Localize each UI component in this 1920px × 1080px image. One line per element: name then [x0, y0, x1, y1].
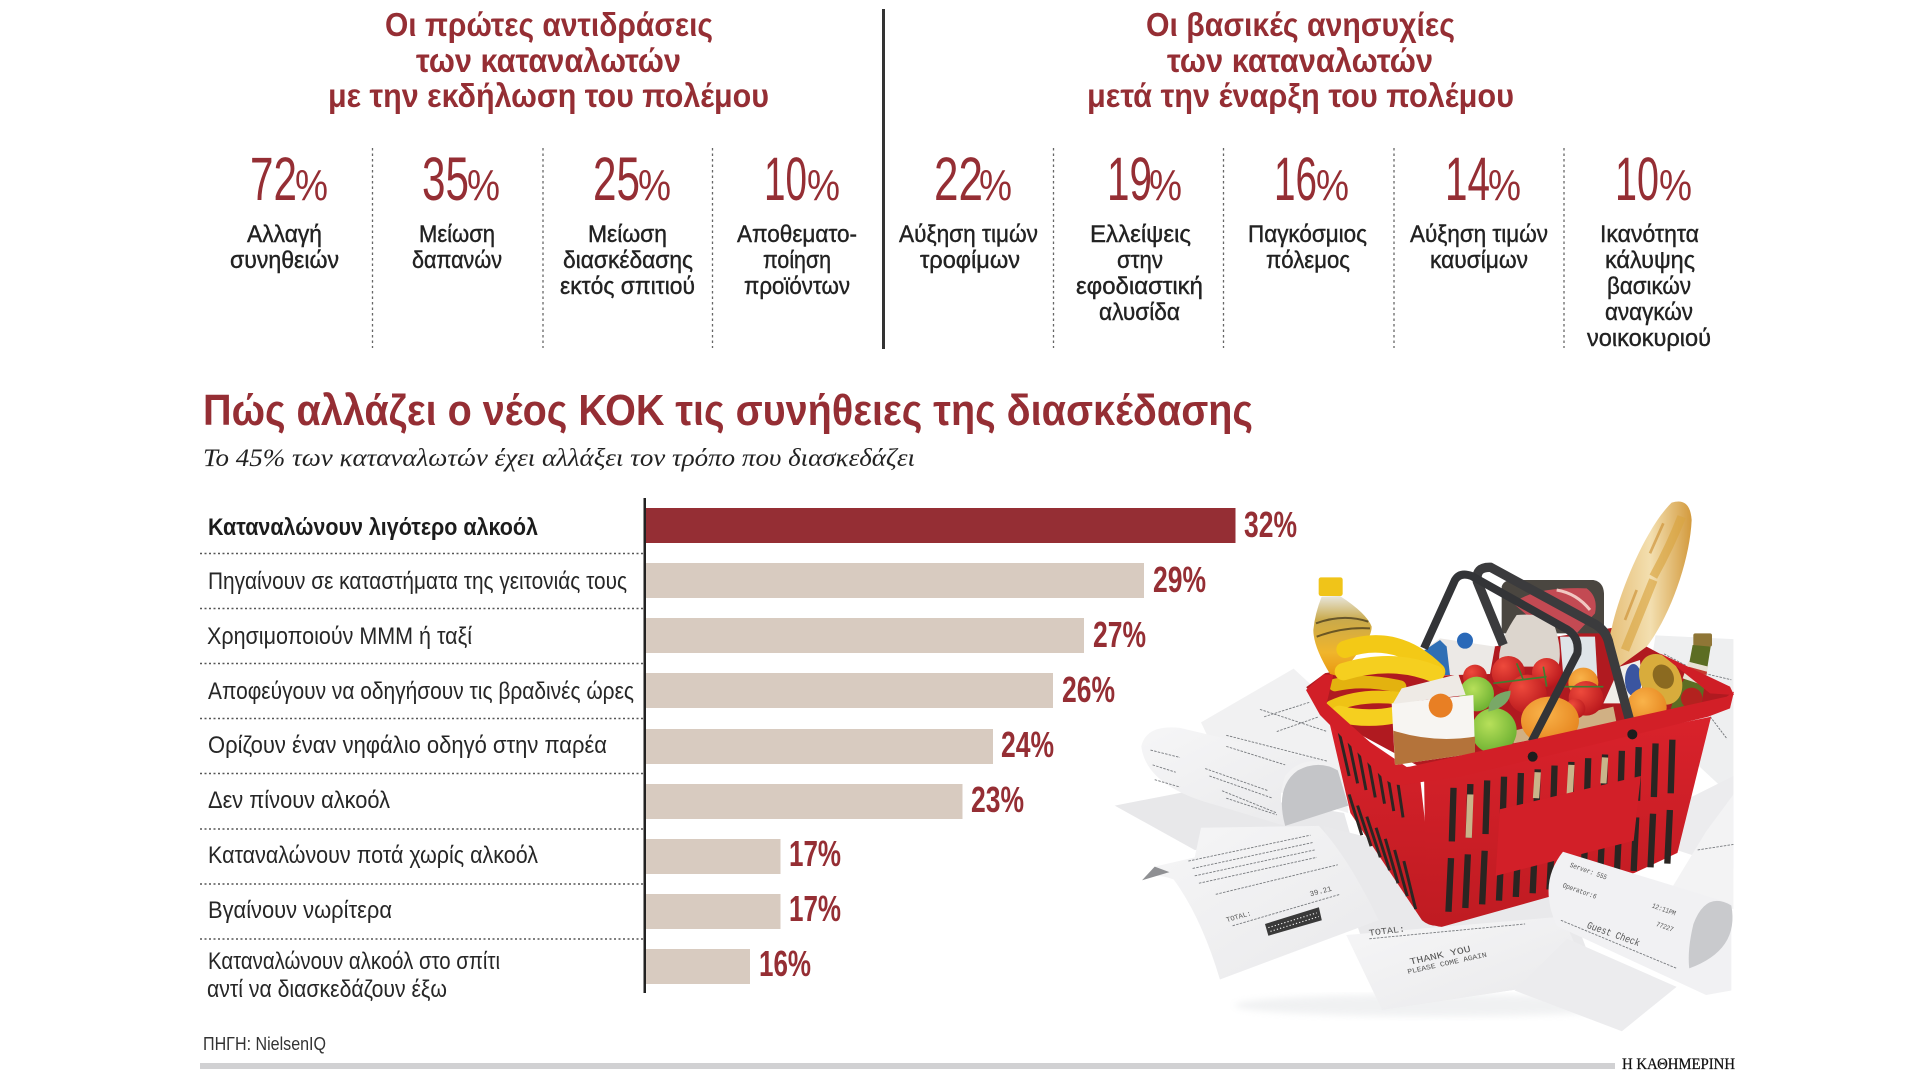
stat: 25% reduced entertainment: % [638, 161, 671, 210]
stat: 14% fuel prices: καυσίμων [1430, 247, 1528, 274]
stat: 22% food prices: % [979, 161, 1012, 210]
panel: first consumer reactions [230, 6, 857, 300]
receipts pile: THANK YOU [1409, 945, 1472, 968]
oil bottle [1313, 577, 1372, 677]
meat tray [1502, 580, 1604, 633]
receipts pile: PLEASE COME AGAIN [1407, 952, 1488, 977]
publisher logo: Η ΚΑΘΗΜΕΡΙΝΗ [1622, 1056, 1735, 1073]
right receipt roll over basket [1549, 852, 1731, 995]
row labels: αντί να διασκεδάζουν έξω [207, 976, 447, 1003]
receipts pile: TOTAL: [1368, 924, 1406, 939]
stat: 10% household needs: 10 [1615, 145, 1659, 213]
stat: 19% supply chain shortages: αλυσίδα [1099, 299, 1180, 326]
row labels: Καταναλώνουν ποτά χωρίς αλκοόλ [208, 842, 538, 869]
tomatoes and oranges [1463, 656, 1617, 745]
panel: bar chart of entertainment habits [200, 498, 1297, 1003]
row labels: Βγαίνουν νωρίτερα [208, 897, 392, 924]
stat: 10% stockpiling: % [807, 161, 840, 210]
heading: main concerns: των καταναλωτών [1167, 42, 1433, 79]
centre divider [882, 9, 885, 349]
bar values: 26% [1062, 669, 1115, 710]
illustration: shopping basket on receipts [1115, 628, 1733, 1031]
stat: 72% change of habits [230, 145, 339, 274]
heading: main concerns: Οι βασικές ανησυχίες [1146, 6, 1455, 43]
stat: 72% change of habits: 72 [250, 145, 297, 213]
stat: 19% supply chain shortages: στην [1117, 247, 1163, 274]
stat: 25% reduced entertainment: διασκέδασης [563, 247, 693, 274]
bananas [1332, 644, 1437, 718]
stat: 14% fuel prices: % [1488, 161, 1521, 210]
bar values: 17% [789, 888, 841, 929]
row labels: Δεν πίνουν αλκοόλ [208, 787, 390, 814]
row labels: Χρησιμοποιούν ΜΜΜ ή ταξί [207, 623, 473, 650]
bar values: 32% [1244, 504, 1297, 545]
stat: 25% reduced entertainment: εκτός σπιτιού [560, 273, 695, 300]
juice carton [1392, 674, 1475, 765]
front handle [1424, 575, 1578, 742]
illustration: shopping basket on receipts: 77227 [1655, 921, 1675, 934]
stat: 10% household needs: αναγκών [1605, 299, 1693, 326]
source note: ΠΗΓΗ: NielsenIQ [203, 1034, 326, 1054]
stat: 10% household needs: νοικοκυριού [1587, 325, 1711, 352]
basket body: left face [1327, 713, 1437, 926]
stat: 10% household needs: Ικανότητα [1600, 221, 1699, 248]
bar values: 29% [1153, 559, 1206, 600]
row labels: Ορίζουν έναν νηφάλιο οδηγό στην παρέα [208, 732, 607, 759]
stat: 35% reduced spending: % [467, 161, 500, 210]
stat: 19% supply chain shortages: εφοδιαστική [1076, 273, 1203, 300]
stat: 10% stockpiling: Αποθεματο- [737, 221, 857, 248]
row labels: Καταναλώνουν λιγότερο αλκοόλ [208, 514, 538, 541]
illustration: shopping basket on receipts: Operator:6 [1561, 882, 1598, 901]
stat: 10% household needs [1587, 145, 1711, 352]
heading: first reactions: των καταναλωτών [416, 42, 681, 79]
stat: 25% reduced entertainment: Μείωση [588, 221, 667, 248]
stat: 72% change of habits: Αλλαγή [247, 221, 322, 248]
stat: 10% household needs: κάλυψης [1605, 247, 1695, 274]
stat: 16% world war: Παγκόσμιος [1248, 221, 1367, 248]
main heading: Πώς αλλάζει ο νέος ΚΟΚ τις συνήθειες της διασκέδασης [203, 386, 1253, 435]
receipts pile: 39.21 [1309, 886, 1334, 899]
bar values: 23% [971, 779, 1024, 820]
beer bottle label [1560, 637, 1597, 677]
blue carton [1423, 633, 1495, 675]
footer bar [200, 1063, 1615, 1069]
stat: 35% reduced spending: 35 [422, 145, 469, 213]
stat: 19% supply chain shortages: Ελλείψεις [1090, 221, 1191, 248]
stat: 72% change of habits: % [295, 161, 328, 210]
baguette [1609, 501, 1692, 668]
bar values: 16% [759, 943, 811, 984]
bars [646, 508, 1236, 984]
bottle and can on the right [1603, 633, 1712, 727]
illustration: shopping basket on receipts: 12:11PM [1650, 902, 1677, 918]
stat: 16% world war: πόλεμος [1266, 247, 1350, 274]
bar values [759, 504, 1297, 984]
stat: 16% world war: 16 [1274, 145, 1317, 213]
panel: main consumer concerns [899, 6, 1711, 352]
apples [1459, 677, 1517, 753]
stat: 35% reduced spending: Μείωση [419, 221, 495, 248]
illustration: shopping basket on receipts: Guest Check [1585, 920, 1642, 949]
stat: 10% household needs: βασικών [1607, 273, 1691, 300]
row labels: Πηγαίνουν σε καταστήματα της γειτονιάς τους [208, 568, 627, 595]
front rim [1306, 674, 1734, 785]
row labels: Καταναλώνουν αλκοόλ στο σπίτι [208, 948, 500, 975]
stat: 10% stockpiling: ποίηση [763, 247, 831, 274]
stat: 16% world war: % [1316, 161, 1349, 210]
heading: first reactions [328, 6, 769, 114]
stat: 14% fuel prices [1410, 145, 1548, 274]
bar values: 17% [789, 833, 841, 874]
stat: 25% reduced entertainment [560, 145, 695, 300]
stat: 35% reduced spending: δαπανών [412, 247, 502, 274]
stat: 72% change of habits: συνηθειών [230, 247, 339, 274]
receipts pile [1115, 635, 1733, 1031]
vertical axis [644, 498, 646, 993]
groceries in the basket [1313, 501, 1712, 765]
basket rim and handles [1306, 567, 1734, 785]
stat: 25% reduced entertainment: 25 [593, 145, 640, 213]
stat: 22% food prices: 22 [934, 145, 983, 213]
basket label plate [1496, 776, 1641, 876]
basket back and interior [1306, 628, 1733, 776]
heading: first reactions: Οι πρώτες αντιδράσεις [385, 6, 713, 43]
receipts pile: TOTAL: [1225, 910, 1253, 925]
subtitle: Το 45% των καταναλωτών έχει αλλάξει τον τρόπο που διασκεδάζει [203, 445, 915, 472]
stat: 10% household needs: % [1659, 161, 1692, 210]
back handle [1477, 567, 1630, 722]
bar values: 24% [1001, 724, 1054, 765]
stat: 10% stockpiling: προϊόντων [744, 273, 850, 300]
heading: main concerns [1087, 6, 1514, 114]
basket body: front face [1424, 717, 1711, 927]
stat: 19% supply chain shortages: % [1149, 161, 1182, 210]
stat: 19% supply chain shortages [1076, 145, 1203, 326]
row labels [207, 514, 634, 1003]
stat: 14% fuel prices: Αύξηση τιμών [1410, 221, 1548, 248]
stat: 19% supply chain shortages: 19 [1107, 145, 1152, 213]
stat: 10% stockpiling [737, 145, 857, 300]
stat: 22% food prices: Αύξηση τιμών [899, 221, 1038, 248]
heading: first reactions: με την εκδήλωση του πολέμου [328, 77, 769, 114]
stat: 14% fuel prices: 14 [1445, 145, 1490, 213]
heading: main concerns: μετά την έναρξη του πολέμου [1087, 77, 1514, 114]
milk jug [1499, 615, 1560, 667]
illustration: shopping basket on receipts: Server: 555 [1568, 862, 1608, 882]
stat: 22% food prices [899, 145, 1038, 274]
bar values: 27% [1093, 614, 1146, 655]
stat: 22% food prices: τροφίμων [920, 247, 1020, 274]
stat: 16% world war [1248, 145, 1367, 274]
row labels: Αποφεύγουν να οδηγήσουν τις βραδινές ώρες [208, 678, 634, 705]
stat: 10% stockpiling: 10 [764, 145, 807, 213]
stat: 35% reduced spending [412, 145, 502, 274]
